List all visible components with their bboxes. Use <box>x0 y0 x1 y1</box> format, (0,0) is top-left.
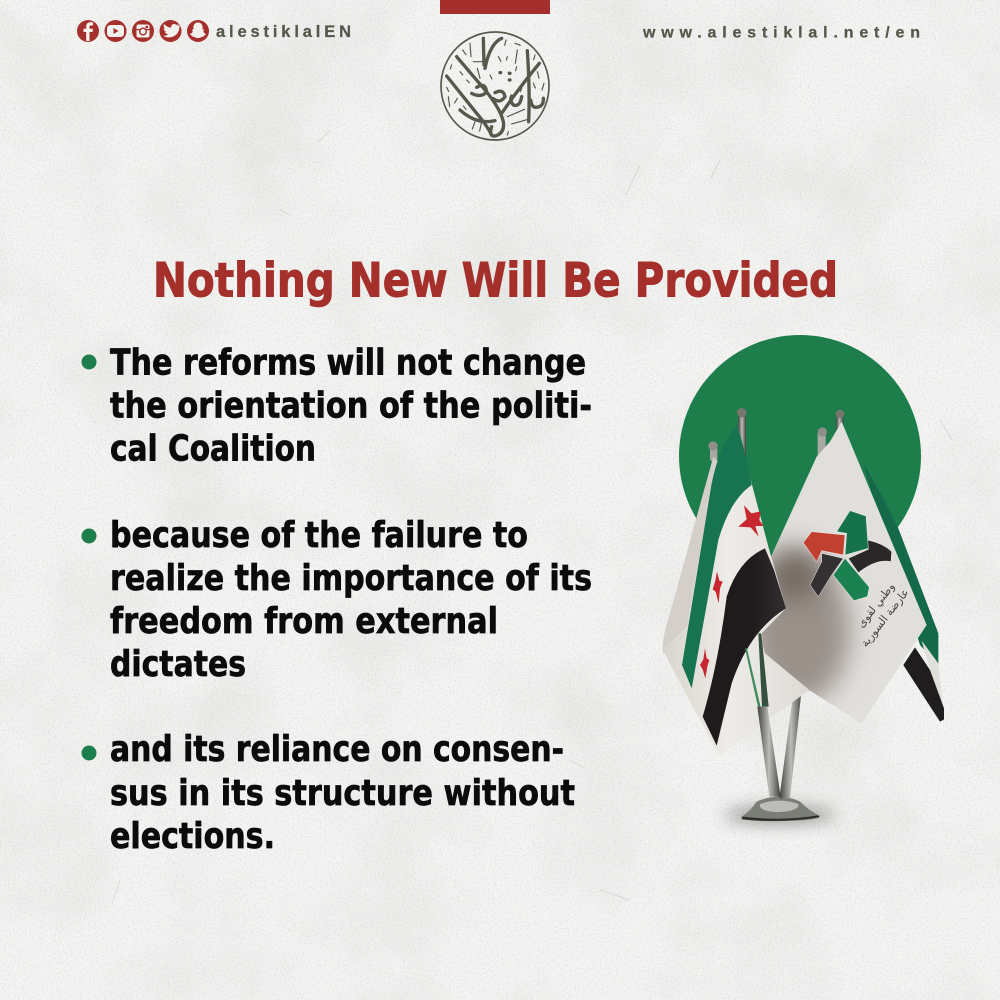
bullet point 2: realize the importance of its <box>110 558 592 599</box>
flag stand base <box>741 797 820 821</box>
bullet point 1: cal Coalition <box>110 428 316 470</box>
bullet point 2 <box>82 515 592 685</box>
icon: youtube <box>104 20 126 42</box>
green circle behind flags <box>679 335 921 577</box>
flag poles <box>708 408 844 798</box>
bullet marker 1 <box>82 354 96 370</box>
black stripe <box>703 548 786 746</box>
bullet point 2: dictates <box>110 644 246 685</box>
bullet point 3: sus in its structure without <box>110 773 575 814</box>
icon: snapchat <box>187 20 209 42</box>
Syrian revolution flag <box>663 425 809 755</box>
title: Nothing New Will Be Provided <box>153 254 838 308</box>
bullet point 1: the orientation of the politi- <box>110 386 592 426</box>
coalition logo <box>803 511 892 601</box>
front flag poles <box>745 633 781 797</box>
bullet point 2: because of the failure to <box>110 515 528 556</box>
bullet point 3: elections. <box>110 816 275 857</box>
website url: www.alestiklal.net/en <box>642 24 920 42</box>
bullet point 2: freedom from external <box>110 601 498 642</box>
icon: facebook <box>77 20 99 42</box>
green stripe <box>682 425 752 688</box>
base shadow <box>723 808 837 822</box>
social media handle row <box>77 20 351 42</box>
illustration: two table flags on stand <box>663 408 944 822</box>
coalition flag caption: وطني لقوى <box>854 580 897 630</box>
bullet point 1 <box>82 342 592 470</box>
icon: calligraphy logo roundel <box>441 32 549 140</box>
bullet point 3 <box>82 729 575 857</box>
bullet point 3: and its reliance on consen- <box>110 729 564 770</box>
social handle text: alestiklalEN <box>216 23 351 41</box>
coalition flag <box>762 422 926 723</box>
right back flag <box>863 463 944 722</box>
red stars <box>700 505 763 678</box>
icon: twitter <box>160 20 182 42</box>
top red bar <box>440 0 550 14</box>
icon: instagram <box>132 20 154 42</box>
coalition flag caption: عارضة السورية <box>858 586 912 649</box>
bullet point 1: The reforms will not change <box>110 342 586 384</box>
bullet marker 2 <box>82 528 96 544</box>
bullet marker 3 <box>82 746 96 760</box>
